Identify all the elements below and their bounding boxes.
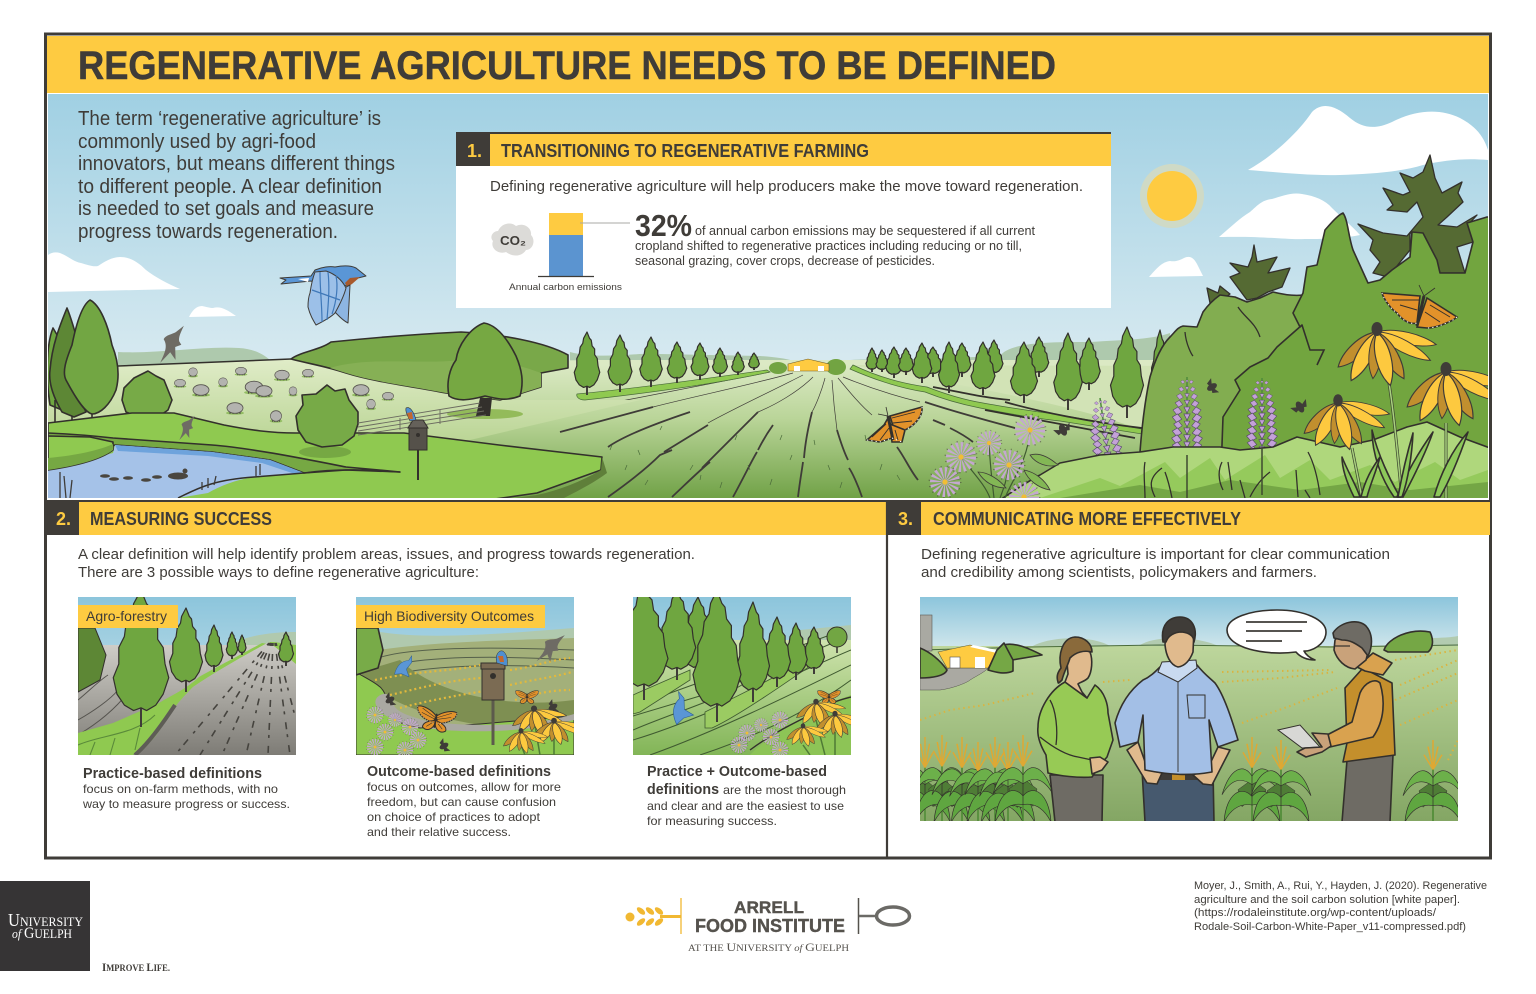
landscape illustration bbox=[47, 94, 1506, 506]
logo: university of guelph bbox=[0, 881, 90, 971]
intro text 1: Defining regenerative agriculture will help producers make the move toward regeneration. bbox=[490, 179, 1083, 195]
man in vest bbox=[1278, 622, 1395, 822]
illustration: high biodiversity bbox=[356, 597, 585, 755]
outer frame bbox=[46, 34, 1490, 858]
strip under left tree row bbox=[577, 370, 770, 400]
man in blue shirt bbox=[1115, 617, 1238, 822]
label: agro-forestry bbox=[78, 605, 178, 628]
logo: university of guelph: of GUELPH bbox=[12, 925, 72, 942]
panel 2 intro text: A clear definition will help identify problem areas, issues, and progress towards regeneration. bbox=[78, 546, 695, 563]
text: practice-based: focus on on-farm methods, with no bbox=[83, 782, 278, 796]
field strip beside tree row bbox=[850, 365, 1142, 434]
text: outcome-based bbox=[367, 764, 561, 839]
illustration: farmers talking bbox=[898, 597, 1463, 822]
right oak leaves bbox=[1207, 155, 1477, 303]
panel 3 intro text: Defining regenerative agriculture is important for clear communication bbox=[921, 546, 1390, 563]
statistic: 32% bbox=[635, 208, 692, 243]
dark hill bbox=[291, 332, 568, 400]
monarch butterfly on field bbox=[867, 407, 922, 442]
right shrub mid mass bbox=[1221, 212, 1488, 449]
logo: university of guelph: UNIVERSITY bbox=[8, 910, 84, 930]
icon: co2 cloud: CO₂ bbox=[500, 234, 526, 248]
flower stems bbox=[1352, 383, 1446, 498]
text: outcome-based: freedom, but can cause confusion bbox=[367, 795, 556, 809]
front meadow bbox=[48, 413, 602, 500]
text: practice + outcome bbox=[647, 764, 846, 828]
intro paragraph: progress towards regeneration. bbox=[78, 221, 338, 243]
bees bbox=[1052, 377, 1311, 439]
statistic: of annual carbon emissions may be sequestered if all current bbox=[695, 224, 1036, 238]
aster stems and leaves bbox=[961, 430, 1058, 498]
text: practice + outcome: are the most thorough bbox=[723, 783, 846, 797]
asters bbox=[936, 421, 1039, 506]
left meadow bbox=[48, 359, 640, 445]
logo: arrell food institute: FOOD INSTITUTE bbox=[695, 916, 845, 936]
clouds bbox=[48, 106, 1488, 317]
logo: arrell food institute: ARRELL bbox=[734, 898, 804, 917]
label: agro-forestry: Agro-forestry bbox=[86, 608, 167, 624]
intro paragraph: The term ‘regenerative agriculture’ is bbox=[78, 108, 381, 130]
foreground grass bbox=[1000, 422, 1490, 500]
logo: arrell food institute: AT THE UNIVERSITY of GUELPH bbox=[688, 942, 850, 954]
grass blades bbox=[1144, 452, 1320, 498]
text: practice + outcome: for measuring success. bbox=[647, 814, 777, 828]
panel 1: transitioning bbox=[456, 132, 1111, 308]
logo: arrell food institute bbox=[626, 898, 910, 954]
tall grass leaves bbox=[1342, 430, 1468, 497]
statistic bbox=[635, 208, 1036, 268]
title band bbox=[47, 36, 1489, 93]
orchid stems bbox=[1187, 448, 1262, 498]
intro paragraph: is needed to set goals and measure bbox=[78, 198, 374, 220]
title: REGENERATIVE AGRICULTURE NEEDS TO BE DEFINED bbox=[78, 44, 1056, 88]
label: high biodiversity: High Biodiversity Outcomes bbox=[364, 608, 534, 624]
text: outcome-based: and their relative success. bbox=[367, 825, 511, 839]
swallows bbox=[154, 320, 199, 443]
monarch butterfly on shrub bbox=[1382, 285, 1457, 328]
far-right pale field bbox=[854, 365, 1152, 427]
text: practice + outcome: Practice + Outcome-based bbox=[647, 764, 827, 780]
sun bbox=[1140, 164, 1204, 228]
panel 3 intro text bbox=[921, 546, 1390, 581]
label: high biodiversity bbox=[356, 605, 545, 628]
sheep flock bbox=[174, 367, 394, 423]
panel 3 header: COMMUNICATING MORE EFFECTIVELY bbox=[933, 509, 1241, 529]
illustration: agro-forestry bbox=[78, 590, 296, 755]
bar chart: carbon emissions bbox=[509, 213, 630, 293]
citation: agriculture and the soil carbon solution [white paper]. bbox=[1194, 894, 1460, 906]
text: practice + outcome: definitions bbox=[647, 782, 719, 798]
citation: Rodale-Soil-Carbon-White-Paper_v11-compressed.pdf) bbox=[1194, 921, 1466, 933]
farm buildings bbox=[769, 359, 846, 375]
statistic: seasonal grazing, cover crops, decrease of pesticides. bbox=[635, 254, 935, 268]
citation: Moyer, J., Smith, A., Rui, Y., Hayden, J. (2020). Regenerative bbox=[1194, 880, 1487, 892]
icon: co2 cloud bbox=[491, 223, 533, 256]
text: practice + outcome: and clear and are the easiest to use bbox=[647, 799, 844, 813]
woman bbox=[1038, 637, 1113, 822]
bluebird bbox=[280, 266, 366, 325]
panel 2 intro text bbox=[78, 546, 695, 581]
field bbox=[118, 360, 1154, 498]
shrub 1 bbox=[122, 371, 172, 417]
pond near bank bbox=[178, 470, 400, 498]
heading 1: TRANSITIONING TO REGENERATIVE FARMING bbox=[501, 141, 869, 161]
reeds bbox=[60, 464, 260, 498]
shrub 2 bbox=[296, 385, 358, 458]
panel 2 intro text: There are 3 possible ways to define regenerative agriculture: bbox=[78, 564, 479, 581]
intro paragraph: innovators, but means different things bbox=[78, 153, 395, 175]
text: practice-based bbox=[82, 766, 290, 811]
intro paragraph bbox=[78, 108, 395, 243]
intro paragraph: commonly used by agri-food bbox=[78, 131, 316, 153]
number 1: 1. bbox=[467, 141, 482, 161]
illustration: practice + outcome bbox=[620, 585, 864, 755]
large oak tree bbox=[447, 323, 523, 419]
text: practice-based: way to measure progress or success. bbox=[82, 797, 290, 811]
intro paragraph: to different people. A clear definition bbox=[78, 176, 382, 198]
left trees bbox=[47, 300, 118, 430]
panel 2 header bbox=[46, 500, 887, 535]
panel 2 header: MEASURING SUCCESS bbox=[90, 509, 272, 529]
distant hills bbox=[118, 333, 1170, 368]
citation: (https://rodaleinstitute.org/wp-content/uploads/ bbox=[1194, 907, 1437, 919]
fence bbox=[358, 403, 486, 435]
meadow bank edge bbox=[516, 457, 607, 498]
text: practice-based: Practice-based definitions bbox=[83, 766, 262, 782]
panel 3 header bbox=[888, 500, 1490, 535]
panel 2 header: 2. bbox=[56, 509, 71, 529]
tagline: IMPROVE LIFE. bbox=[102, 962, 170, 974]
panel 3 intro text: and credibility among scientists, policymakers and farmers. bbox=[921, 564, 1317, 581]
panel 3 header: 3. bbox=[898, 509, 913, 529]
text: outcome-based: on choice of practices to adopt bbox=[367, 810, 541, 824]
pond bbox=[48, 445, 304, 498]
text: outcome-based: focus on outcomes, allow for more bbox=[367, 780, 561, 794]
pond bank bbox=[48, 433, 400, 473]
text: outcome-based: Outcome-based definitions bbox=[367, 764, 551, 780]
citation bbox=[1194, 880, 1487, 933]
statistic: cropland shifted to regenerative practices including reducing or no till, bbox=[635, 239, 1022, 253]
bar chart: carbon emissions: Annual carbon emissions bbox=[509, 282, 622, 293]
tablet bbox=[1278, 725, 1320, 748]
orchid spikes bbox=[1090, 377, 1278, 456]
ducks bbox=[100, 468, 188, 482]
bird house bbox=[406, 408, 428, 480]
left peninsula bbox=[48, 436, 113, 470]
distant left tree row bbox=[574, 332, 759, 395]
field furrows bbox=[560, 372, 1015, 497]
black-eyed susans bbox=[1304, 322, 1488, 450]
hill lower tone bbox=[330, 360, 541, 400]
distant right tree row bbox=[866, 327, 1170, 420]
speech bubble bbox=[1227, 610, 1326, 660]
right shrub light mass bbox=[1139, 291, 1302, 452]
